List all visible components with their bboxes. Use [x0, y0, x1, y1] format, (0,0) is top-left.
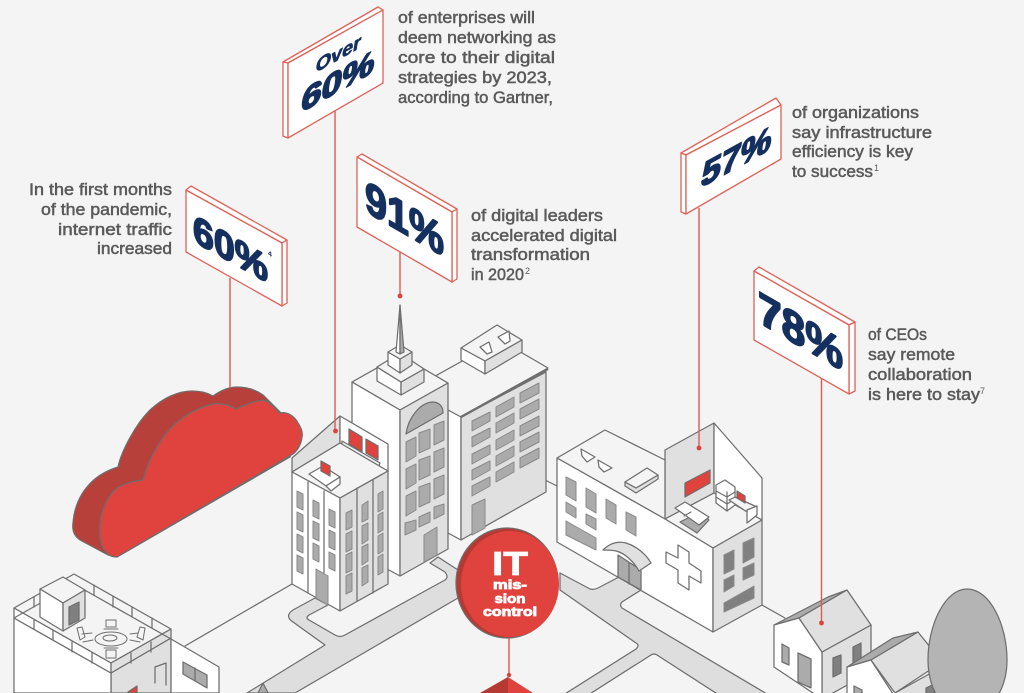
text: pandemic internet traffic: of the pandemic, [41, 201, 172, 219]
connector: over 60% to office [333, 110, 338, 433]
text: pandemic internet traffic [29, 181, 172, 258]
cloud [73, 387, 302, 557]
house one [774, 590, 871, 693]
text: digital leaders: of digital leaders [471, 207, 603, 225]
skyscraper tower [352, 305, 448, 576]
text: remote collaboration: collaboration [868, 366, 972, 384]
hospital [557, 423, 762, 632]
text: digital leaders: in 2020 [471, 266, 524, 284]
tower windows [405, 421, 444, 562]
tower setback [377, 345, 424, 395]
text: digital leaders: accelerated digital [471, 227, 617, 245]
IT mission control badge [456, 528, 559, 638]
text: pandemic internet traffic: increased [97, 240, 172, 258]
windows [472, 383, 539, 535]
small office building with rooftop [292, 416, 388, 611]
text: infrastructure efficiency: efficiency is key [792, 143, 914, 161]
text: infrastructure efficiency: of organizations [792, 104, 919, 122]
connector: 60% traffic to cloud [229, 278, 231, 388]
roof box [461, 325, 522, 374]
arch window [406, 402, 443, 434]
text: enterprises networking: according to Gartner, [398, 89, 553, 107]
icon: medical cross [666, 545, 701, 590]
badge text: control [483, 605, 537, 619]
sign: 60% traffic [186, 186, 287, 306]
text: digital leaders [471, 207, 617, 284]
hospital roof details [581, 449, 658, 493]
connector: 91% to tower [398, 250, 402, 298]
text: enterprises networking [398, 9, 556, 107]
text: enterprises networking: core to their digital [398, 49, 555, 67]
text: infrastructure efficiency: to success [792, 163, 873, 181]
text: infrastructure efficiency: 1 [874, 163, 879, 173]
sign: 57% [681, 98, 781, 214]
rooftop desk and monitor [309, 461, 340, 491]
text: infrastructure efficiency: say infrastructure [792, 124, 932, 142]
text: remote collaboration: of CEOs [868, 326, 927, 344]
small spire [258, 683, 268, 693]
sign: 60% traffic: 60% [193, 206, 268, 291]
cloud: front face [100, 400, 302, 557]
sign: 91%: 91% [365, 171, 444, 267]
text: digital leaders: 2 [525, 266, 530, 276]
text: enterprises networking: of enterprises will [398, 9, 535, 27]
sign: over 60% [283, 7, 383, 138]
text: remote collaboration: say remote [868, 346, 955, 364]
street network [185, 480, 785, 693]
text: remote collaboration [868, 326, 985, 404]
connector: 57% to hospital [697, 208, 701, 450]
hospital windows [566, 477, 636, 550]
text: pandemic internet traffic: In the first months [29, 181, 172, 199]
sign: 57%: 57% [699, 118, 775, 196]
room furniture: drawers, desk and monitor [716, 480, 757, 523]
badge text [483, 545, 537, 619]
data centre roof under badge [480, 638, 533, 693]
badge text: mis- [493, 578, 527, 592]
text: enterprises networking: strategies by 2023, [398, 69, 552, 87]
text: infrastructure efficiency [792, 104, 932, 181]
tree [928, 589, 1007, 693]
apartment building behind tower [412, 325, 548, 540]
text: enterprises networking: deem networking as [398, 29, 556, 47]
badge text: sion [494, 592, 526, 606]
spire [396, 305, 404, 354]
hospital side windows [724, 538, 754, 612]
badge text: IT [492, 545, 528, 582]
office windows [297, 491, 383, 605]
text: remote collaboration: 7 [980, 386, 985, 396]
hospital entrance [603, 542, 651, 590]
sign: 78%: 78% [758, 282, 843, 381]
text: remote collaboration: is here to stay [868, 386, 981, 404]
cloud: extruded back [73, 387, 300, 557]
sign: over 60%: Over [314, 29, 363, 78]
rooftop penthouse [40, 577, 85, 631]
rooftop terrace building [14, 574, 268, 693]
sign: 60% traffic: 4 [268, 248, 273, 259]
sign: over 60%: 60% [299, 42, 378, 120]
connector: 78% to house [819, 366, 824, 625]
house two [847, 632, 942, 693]
text: pandemic internet traffic: internet traffic [58, 221, 172, 239]
text: digital leaders: transformation [471, 246, 590, 264]
terrace table and chairs [77, 620, 145, 658]
room furniture: bed [675, 502, 709, 533]
red screens [349, 429, 378, 460]
